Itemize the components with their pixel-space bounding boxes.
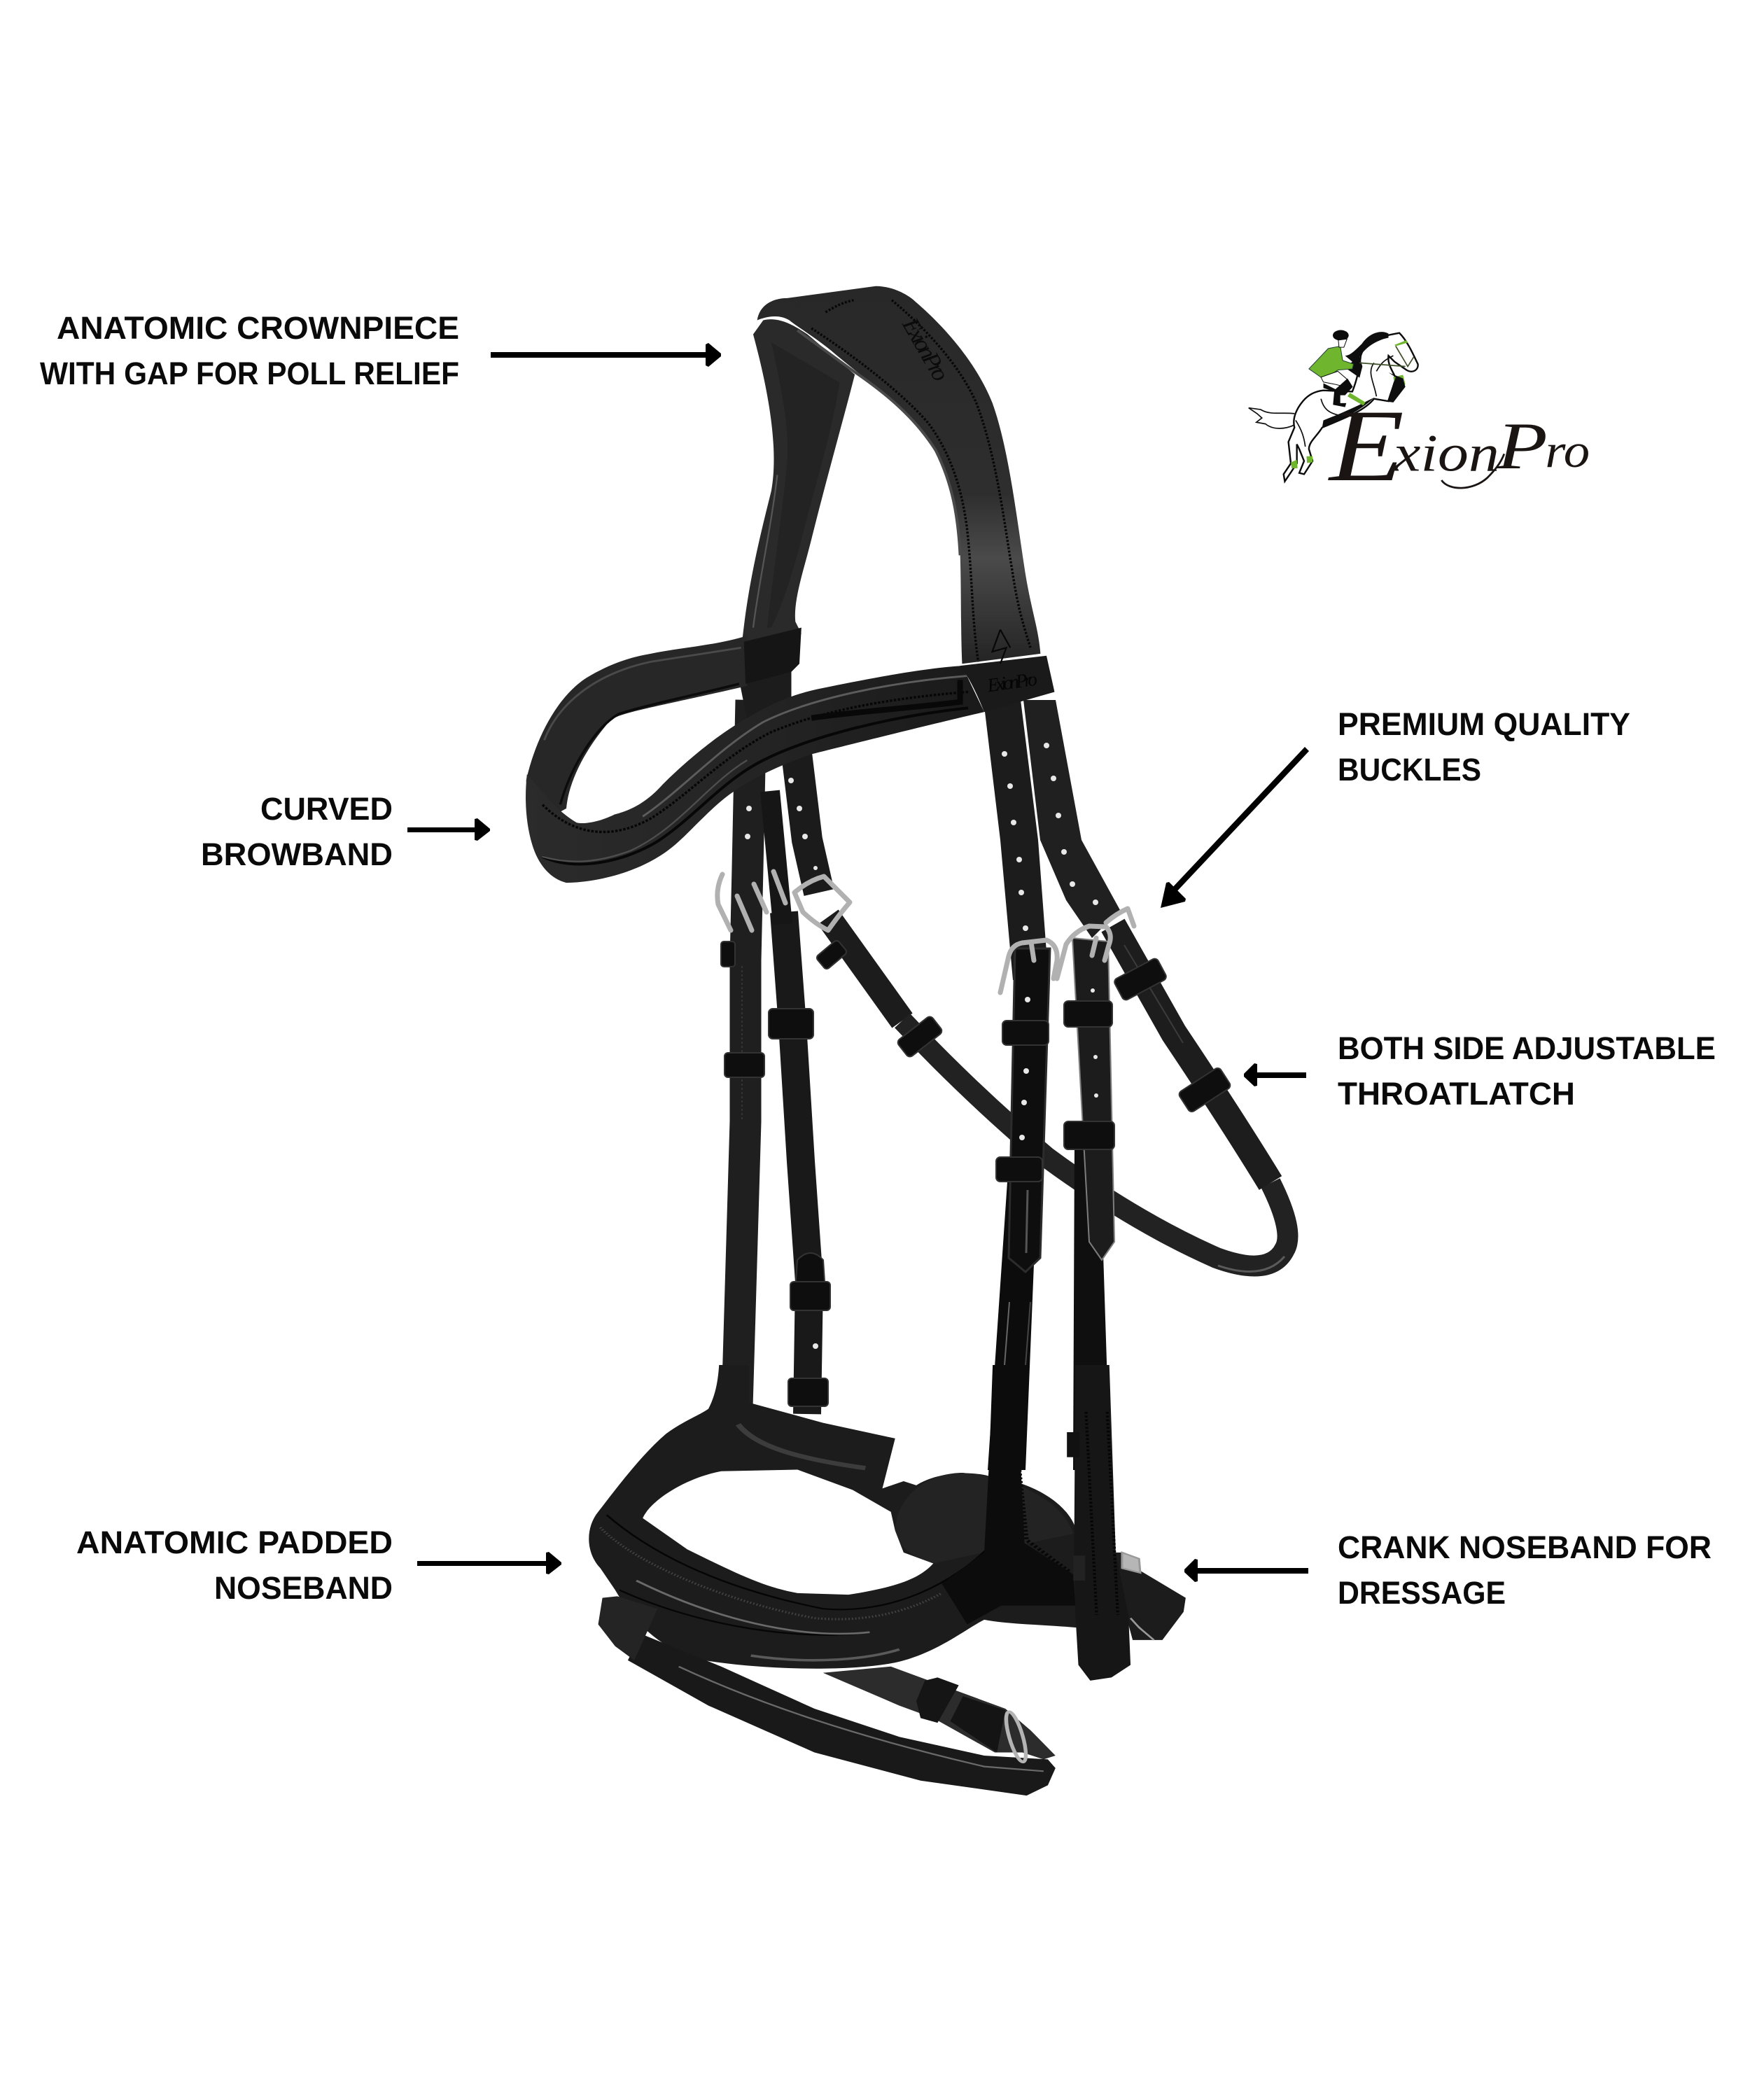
- logo: wordmark swash: [1441, 454, 1504, 488]
- label: premium quality buckles: PREMIUM QUALITY: [1338, 706, 1630, 742]
- label: anatomic crownpiece: WITH GAP FOR POLL RELIEF: [40, 356, 459, 391]
- logo: horse tail: [1249, 408, 1294, 428]
- crown embossed logo: ExionPro: [897, 313, 954, 386]
- crown and browband keepers: [744, 628, 802, 684]
- logo: body line detail: [1296, 356, 1393, 447]
- noseband stitching and sheen: [601, 1424, 1069, 1660]
- strap keepers: [721, 939, 1232, 1406]
- nose pad: [895, 1473, 1073, 1563]
- label: crank noseband for dressage: [1338, 1530, 1712, 1611]
- crank buckle: [1122, 1553, 1154, 1640]
- logo: wordmark: ro: [1545, 424, 1590, 477]
- arrow: crank noseband: [1184, 1559, 1308, 1582]
- throatlatch strap: [828, 917, 1288, 1271]
- right cheek straps: [983, 700, 1120, 1470]
- label: anatomic crownpiece: ANATOMIC CROWNPIECE: [57, 310, 459, 346]
- arrow: crownpiece: [491, 343, 721, 367]
- logo: horse body: [1284, 333, 1418, 482]
- logo: wordmark: P: [1496, 408, 1548, 483]
- left strap holes: [745, 778, 818, 1349]
- buckles: [718, 872, 1134, 993]
- logo: belly shadow: [1322, 398, 1374, 428]
- crown stitching: [811, 300, 1030, 662]
- label: premium quality buckles: BUCKLES: [1338, 752, 1481, 788]
- bridle photo illustration: [526, 286, 1288, 1795]
- crown outer strap: [757, 286, 1040, 664]
- window in noseband: [643, 1470, 933, 1595]
- logo: wordmark: xion: [1392, 425, 1499, 482]
- arrow: buckles: [1161, 747, 1309, 908]
- crown padded lining: [741, 319, 855, 652]
- noseband: [589, 1365, 1186, 1795]
- logo: front legs: [1387, 372, 1406, 402]
- label: anatomic padded noseband: NOSEBAND: [214, 1570, 393, 1606]
- keeper logo: ExionPro: [985, 668, 1039, 696]
- logo: wordmark: [1328, 388, 1590, 503]
- left cheek straps: [737, 700, 819, 1414]
- label: anatomic padded noseband: ANATOMIC PADDED: [76, 1525, 393, 1560]
- logo: girth: [1348, 393, 1366, 405]
- arrow: throatlatch: [1244, 1063, 1306, 1086]
- label: crank noseband for dressage: DRESSAGE: [1338, 1575, 1506, 1611]
- label: anatomic padded noseband: [76, 1525, 393, 1606]
- label: curved browband: BROWBAND: [201, 836, 393, 872]
- label: curved browband: CURVED: [260, 791, 393, 827]
- logo: green boots: [1291, 456, 1312, 468]
- right strap holes: [1002, 743, 1098, 1140]
- logo: green browband and bridle: [1393, 340, 1408, 389]
- arrow: browband: [407, 818, 490, 841]
- logo: wordmark: E: [1328, 388, 1404, 503]
- back browband: [526, 636, 747, 829]
- label: crank noseband for dressage: CRANK NOSEBAND FOR: [1338, 1530, 1712, 1565]
- crownpiece and browband: [526, 286, 1054, 883]
- cheek to noseband joint: [941, 1365, 1075, 1625]
- logo: rider legs: [1321, 371, 1348, 387]
- logo: ExionPro: [1249, 330, 1590, 503]
- label: both side adjustable throatlatch: [1338, 1030, 1716, 1112]
- label: curved browband: [201, 791, 393, 872]
- logo: reins: [1359, 346, 1414, 367]
- logo: horse mane: [1345, 332, 1389, 378]
- logo: saddle and boot: [1324, 379, 1353, 407]
- label: both side adjustable throatlatch: THROATLATCH: [1338, 1076, 1575, 1112]
- strap under browband: [740, 670, 791, 720]
- logo: rider jacket: [1309, 346, 1354, 377]
- front browband: [526, 666, 984, 883]
- logo: face: [1338, 339, 1347, 347]
- label: premium quality buckles: [1338, 706, 1630, 788]
- arrow: noseband: [417, 1552, 561, 1574]
- logo: helmet: [1333, 330, 1349, 341]
- chin strap: [628, 1634, 1056, 1795]
- label: both side adjustable throatlatch: BOTH SIDE ADJUSTABLE: [1338, 1030, 1716, 1066]
- browband channels: [542, 676, 968, 864]
- label: anatomic crownpiece: [40, 310, 459, 391]
- crank loop: [1074, 1365, 1130, 1681]
